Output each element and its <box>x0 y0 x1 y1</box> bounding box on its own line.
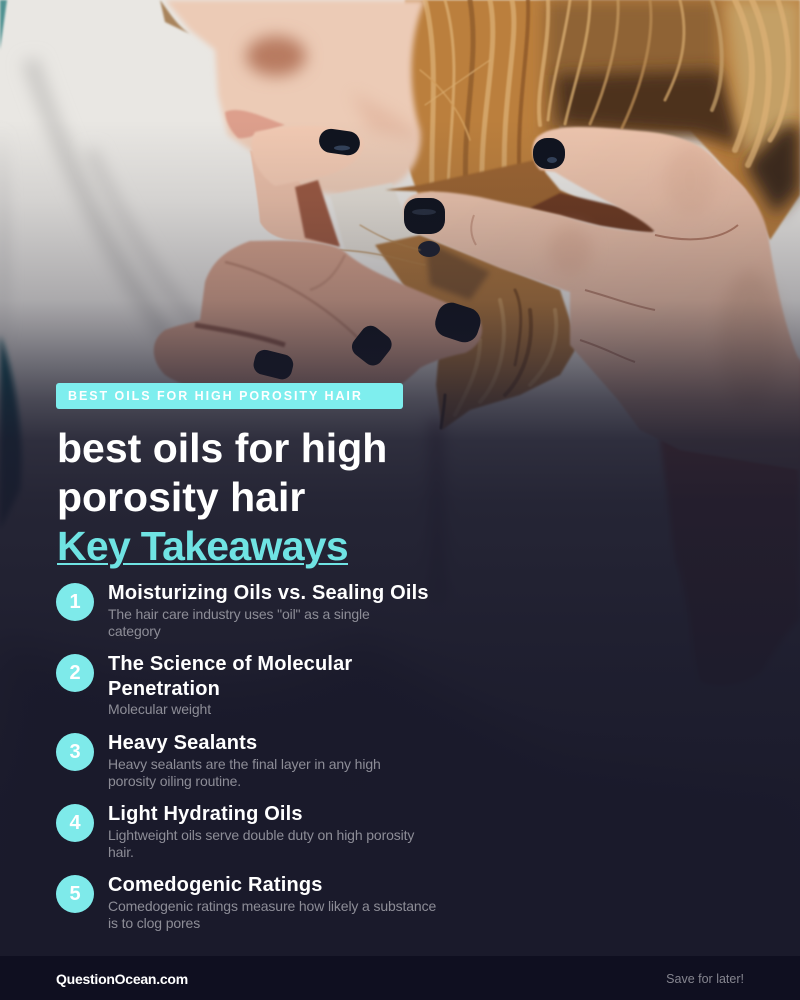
number badge: 3 <box>69 741 81 763</box>
item heading line: Penetration <box>108 678 220 700</box>
item text line: porosity oiling routine. <box>108 773 241 789</box>
hair below fingers <box>340 160 660 430</box>
item 3 <box>56 732 381 789</box>
item text line: hair. <box>108 844 134 860</box>
item heading: Moisturizing Oils vs. Sealing Oils <box>108 582 429 604</box>
right hand <box>403 127 800 470</box>
footer bar <box>0 956 800 1000</box>
category badge: BEST OILS FOR HIGH POROSITY HAIR <box>68 389 363 403</box>
item text line: category <box>108 623 161 639</box>
item heading line: The Science of Molecular <box>108 653 352 675</box>
hair mass <box>395 0 800 240</box>
hair strands <box>420 0 788 195</box>
white gap behind hand <box>330 183 415 265</box>
item text line: Comedogenic ratings measure how likely a substance <box>108 898 436 914</box>
number badge <box>56 733 94 771</box>
item 5 <box>56 874 436 931</box>
number badge: 2 <box>69 662 81 684</box>
title <box>57 425 387 569</box>
number badge <box>56 875 94 913</box>
number badge: 5 <box>69 883 81 905</box>
item text line: The hair care industry uses "oil" as a single <box>108 606 370 622</box>
item text line: Heavy sealants are the final layer in any high <box>108 756 381 772</box>
title line two: porosity hair <box>57 474 305 520</box>
item heading: Heavy Sealants <box>108 732 257 754</box>
item text line: Molecular weight <box>108 701 211 717</box>
item text line: is to clog pores <box>108 915 200 931</box>
category badge <box>56 383 403 409</box>
item heading: Comedogenic Ratings <box>108 874 323 896</box>
thumb and chin finger <box>250 126 364 247</box>
item 4 <box>56 803 414 860</box>
item text line: Lightweight oils serve double duty on high porosity <box>108 827 414 843</box>
left hand <box>154 241 482 405</box>
item heading: Light Hydrating Oils <box>108 803 303 825</box>
title line one: best oils for high <box>57 425 387 471</box>
number badge <box>56 583 94 621</box>
number badge <box>56 654 94 692</box>
sleeve and forearm <box>660 360 800 686</box>
site name: QuestionOcean.com <box>56 971 188 987</box>
save note: Save for later! <box>666 972 744 986</box>
number badge: 4 <box>69 812 81 834</box>
item 2 <box>56 653 352 717</box>
number badge <box>56 804 94 842</box>
item 1 <box>56 582 429 639</box>
nose shadow and lips <box>160 0 420 140</box>
number badge: 1 <box>69 591 81 613</box>
face <box>165 0 425 195</box>
key takeaways subtitle: Key Takeaways <box>57 523 348 569</box>
dark navy nails <box>251 127 565 381</box>
